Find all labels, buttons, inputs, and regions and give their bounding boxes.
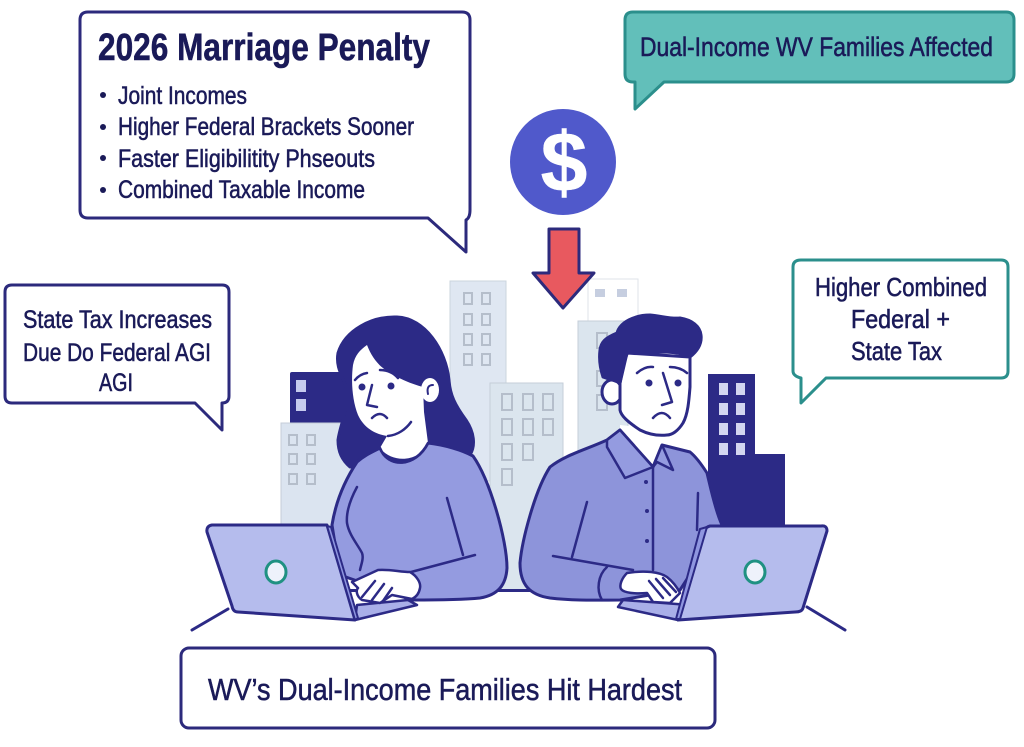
collar	[607, 430, 653, 478]
bullet list	[100, 82, 414, 204]
laptop logo	[745, 561, 765, 583]
shirt	[520, 430, 722, 600]
callout: State Tax Increases: State Tax Increases	[23, 306, 212, 334]
hair	[337, 317, 473, 467]
bullet list: Higher Federal Brackets Sooner	[118, 113, 414, 141]
bullet list: Joint Incomes	[118, 82, 247, 110]
sweater	[332, 443, 507, 600]
heading: 2026 Marriage Penalty	[98, 27, 430, 69]
callout: State Tax Increases: AGI	[99, 369, 133, 397]
callout: State Tax Increases: Due Do Federal AGI	[23, 339, 211, 367]
face and neck	[352, 345, 428, 459]
figure: woman with laptop	[192, 317, 507, 630]
face details	[646, 380, 652, 386]
callout: Higher Combined Federal + State Tax: State Tax	[851, 336, 942, 366]
hand	[620, 572, 680, 603]
laptop base	[618, 600, 690, 620]
ear	[421, 378, 439, 402]
buildings background	[281, 279, 785, 592]
bullet list: Combined Taxable Income	[118, 176, 365, 204]
icon: dollar coin	[510, 109, 616, 215]
face	[620, 353, 690, 435]
sleeve lines	[347, 487, 363, 570]
arrow: tax down	[533, 229, 594, 308]
banner: WV's Dual-Income Families Hit Hardest: WV’s Dual-Income Families Hit Hardest	[208, 672, 682, 707]
callout: State Tax Increases	[5, 285, 229, 430]
face details	[358, 384, 366, 390]
callout: Higher Combined Federal + State Tax: Federal +	[851, 304, 950, 334]
callout: 2026 Marriage Penalty	[80, 12, 470, 252]
hand	[352, 570, 420, 603]
laptop lid	[678, 526, 827, 620]
figure: man with laptop	[520, 315, 845, 630]
laptop base	[355, 600, 417, 620]
ear	[602, 380, 622, 404]
hair	[600, 315, 701, 383]
laptop logo	[266, 561, 286, 583]
neck	[620, 425, 668, 470]
bullet list: Faster Eligibilitity Phseouts	[118, 145, 375, 173]
banner: WV's Dual-Income Families Hit Hardest	[181, 648, 715, 728]
icon: dollar coin: $	[541, 115, 587, 209]
callout: Higher Combined Federal + State Tax	[793, 260, 1008, 403]
laptop lid	[207, 525, 355, 620]
callout: Dual-Income WV Families Affected	[625, 12, 1014, 109]
callout: Higher Combined Federal + State Tax: Higher Combined	[815, 272, 987, 302]
